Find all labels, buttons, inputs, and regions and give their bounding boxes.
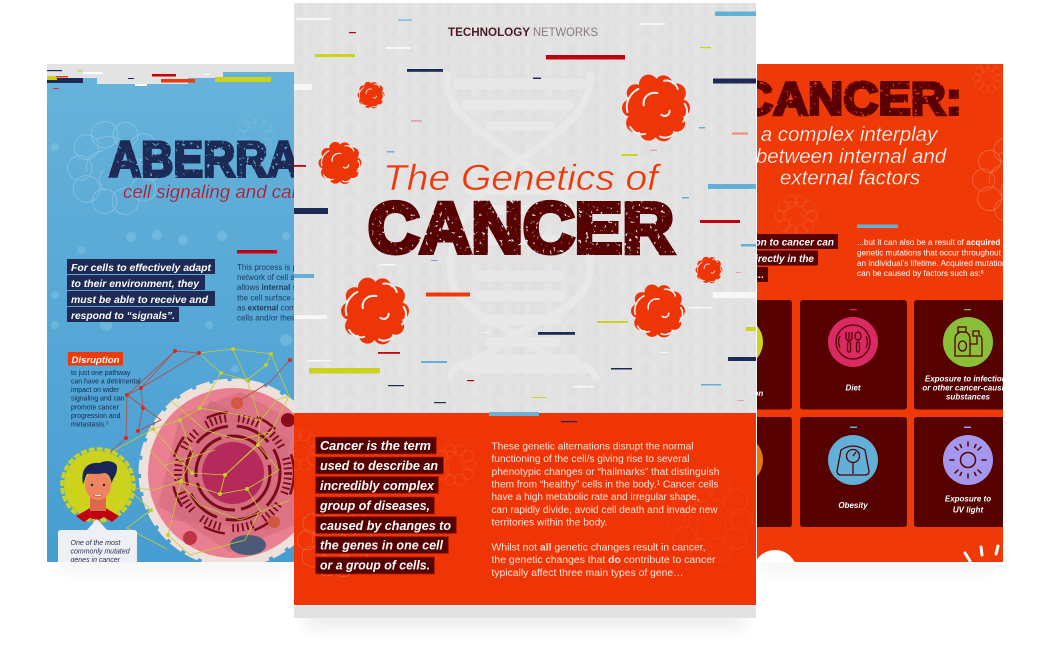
strip bars [47,70,271,89]
body text: cells and/or their environment [237,314,343,322]
disruption label [68,352,123,366]
tile labels: Exposure to infectious [925,374,1012,384]
body text: an individual’s lifetime. Acquired mutations [857,259,1011,268]
faint cell outlines [774,64,1003,234]
body text [857,238,1011,278]
disruption text [71,370,141,428]
disruption text: progression and [71,413,121,420]
body text: can be caused by factors such as: [857,269,981,278]
tile labels: Obesity [838,501,868,510]
title: The Genetics of [383,157,662,198]
callout: genes in cancer [70,557,121,564]
highlight statement [316,437,456,574]
tile labels: Radiation [727,389,763,398]
heading: ABERRANT: ABERRANT [109,132,359,188]
panel: right page, complex interplay [757,64,1003,562]
highlight statement: caused by changes to [320,518,451,533]
body text: This process is part of a [237,263,322,272]
disruption text: metastasis. [71,422,106,428]
subheading: external factors [780,166,920,190]
faint cell outlines [279,429,476,577]
body text: the genetic changes that do contribute to cancer [492,554,716,566]
tile labels: or other cancer-causing [922,384,1014,392]
disruption text: impact on wider [71,387,120,394]
highlight statement [757,234,838,282]
barcode background texture [294,3,756,411]
disruption text: can have a detrimental [71,378,141,386]
highlight statement: arise directly in the [723,254,814,265]
body text: functioning of the cell/s giving rise to several [492,453,690,465]
tumour cell icons [318,75,722,344]
top torn gray strip [47,64,294,84]
disruption text: 3 [106,420,109,426]
highlight statement: In addition to cancer can [716,238,834,248]
tile labels: UV light [953,506,983,514]
tile labels: Diet [845,384,861,392]
DNA helix graphic [447,72,596,380]
highlight statement: to their environment, they [71,278,200,290]
icon: diet [828,317,878,367]
body text [237,264,294,320]
panel: left page, aberrant cell signaling [47,64,294,562]
body text: 8 [981,270,984,276]
avatar [62,449,134,522]
faint molecule background [51,143,292,373]
tile labels: substances [946,392,991,402]
body text: These genetic alternations disrupt the normal [492,440,694,452]
highlight statement: group of diseases, [319,498,430,513]
logo [448,28,598,36]
disruption label: Disruption [72,355,120,366]
network lines [108,349,290,555]
highlight statement: Cancer is the term [320,438,431,453]
body text: them from “healthy” cells in the body.¹ Cancer cells [492,478,718,490]
highlight statement: must be able to receive and [71,294,209,306]
page shadows [60,558,995,626]
factor tiles [757,300,1003,527]
body text: typically affect three main types of gene… [492,567,684,579]
disruption text: to just one pathway [71,370,131,377]
body text: as external communication [237,304,334,312]
icon: bottles [943,317,993,367]
mutation bars [294,12,756,403]
highlight statement: respond to “signals”. [71,310,175,322]
logo: TECHNOLOGY [448,25,530,39]
icon: partial lime circle [757,326,763,358]
orange text panel [279,412,756,606]
callout [58,519,137,562]
highlight statement: incredibly complex [320,478,435,493]
highlight statement: ... [756,270,764,281]
heading: CANCER: CANCER: [738,72,962,124]
highlight statement: For cells to effectively adapt [71,262,211,274]
panel: centre cover page [279,3,756,618]
highlight statement: the genes in one cell [320,538,443,552]
tile labels [757,376,1003,514]
red accent bar [237,250,277,254]
cell with network [106,347,294,562]
icon: scale [828,435,878,485]
body text: can rapidly divide, avoid cell death and invade new [492,504,718,516]
body text: phenotypic changes or “hallmarks” that distinguish [492,466,720,478]
subheading: between internal and [756,145,947,168]
tile labels: Exposure to [945,494,991,504]
subheading: a complex interplay [761,123,939,146]
body text: territories within the body. [492,516,608,528]
body text: have a high metabolic rate and irregular shape, [492,491,700,503]
cloud at bottom [757,550,794,562]
callout: One of the most [70,540,121,547]
subheading [757,126,947,184]
body text: genetic mutations that occur throughout [857,248,1002,258]
faint cell outlines [68,116,274,215]
blue accent bar [857,224,898,228]
icon: partial orange circle [757,444,763,476]
callout: commonly mutated [70,548,131,556]
logo: NETWORKS [533,25,598,39]
body text: the cell surface as well [237,294,318,302]
disruption text: promote cancer [71,404,120,412]
highlight statement: used to describe an [320,458,438,473]
heading: CANCER: CANCER [368,190,674,268]
decorative white strokes [965,546,998,561]
body text [492,440,720,579]
body text: network of cell signaling that [237,273,338,282]
highlight statement: or a group of cells. [320,558,430,572]
body text: allows internal signals at [237,283,327,292]
icon: sun [943,435,993,485]
body text: Whilst not all genetic changes result in cancer, [492,542,706,554]
body text: ...but it can also be a result of acquired [857,238,1000,247]
highlight statement [67,259,215,322]
subheading: cell signaling and cancer [123,182,329,202]
disruption text: signaling and can [71,396,125,402]
